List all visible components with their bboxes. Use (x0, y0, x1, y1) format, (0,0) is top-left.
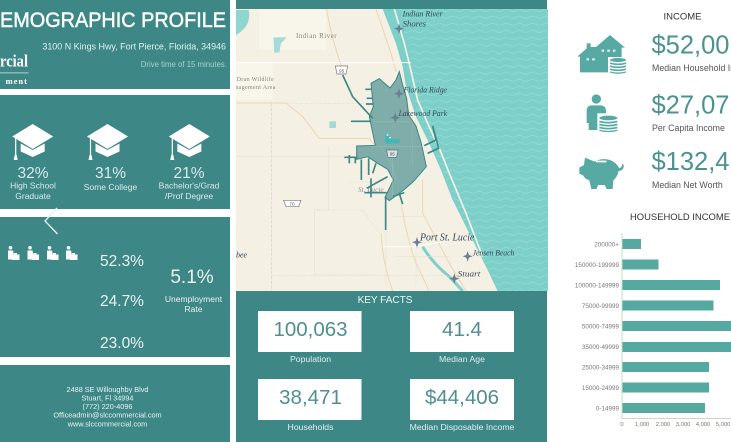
map: interstate shields (284, 66, 398, 207)
logo: rcial (0, 52, 28, 70)
fact: households (258, 379, 362, 432)
stat: median net worth: $132,4 (652, 148, 730, 176)
map: place labels: Shores (403, 19, 427, 29)
panel: contact: (772) 220-4096 (83, 402, 132, 411)
bar chart: household income: 200000+ (594, 242, 619, 248)
stat: median household income: $52,00 (652, 32, 730, 60)
map: place labels: St. Lucie (358, 185, 384, 194)
map: place labels: Jensen Beach (473, 247, 514, 257)
bar chart: household income: 150000-199999 (575, 262, 619, 269)
stat: high school: High School (10, 180, 56, 190)
icon: piggy bank (579, 158, 624, 189)
stat: unemployment: 5.1% (170, 267, 214, 288)
stat: bachelor's (159, 165, 220, 201)
map: land tone (236, 10, 326, 100)
map: interstate shields: 70 (289, 201, 295, 206)
stat: high school (10, 165, 56, 201)
panel: contact (0, 365, 230, 442)
title: EMOGRAPHIC PROFILE (0, 9, 226, 32)
stat: some college: 31% (95, 165, 126, 182)
stat: unemployment (165, 267, 223, 314)
icon: graduation cap 2 (87, 124, 128, 160)
panel: map: Indian River (296, 32, 337, 40)
map: interstate shields: 95 (339, 68, 345, 73)
heading: key facts: KEY FACTS (358, 295, 413, 306)
stat: median household income (652, 32, 731, 73)
bar chart: household income: 50000-74999 (582, 324, 619, 330)
bar chart: household income: 3,000 (676, 422, 690, 428)
panel: header (0, 0, 230, 89)
map: drive-time area (343, 72, 439, 230)
panel: map (235, 0, 548, 291)
employment percentages: 23.0% (100, 335, 144, 352)
fact: population: 100,063 (273, 318, 348, 341)
icon: workers row (8, 246, 78, 260)
stat: median net worth (652, 148, 730, 190)
bar chart: household income: 1,000 (635, 422, 649, 428)
stat: unemployment: Rate (185, 304, 203, 314)
stat: per capita income: Per Capita Income (652, 123, 725, 133)
icon: graduation cap 1 (12, 124, 53, 160)
heading: household income: HOUSEHOLD INCOME (630, 212, 730, 223)
map: place labels: Florida Ridge (403, 84, 447, 94)
panel: contact: www.slccommercial.com (67, 420, 147, 428)
fact: median disposable income (410, 379, 515, 432)
panel: education (0, 95, 230, 209)
bar chart: household income: 0 (620, 422, 624, 428)
fact: median disposable income: $44,406 (425, 386, 499, 409)
stat: some college: Some College (84, 182, 137, 192)
bar chart: household income: 25000-34999 (582, 364, 619, 372)
map: ocean (383, 9, 548, 291)
map: lakes (236, 10, 249, 35)
heading: income: INCOME (664, 12, 702, 22)
bar chart: household income: 2,000 (656, 422, 670, 428)
employment percentages: 24.7% (100, 293, 144, 310)
fact: median disposable income: Median Disposable Income (410, 422, 515, 432)
stat: bachelor's: /Prof Degree (165, 191, 213, 201)
stat: bachelor's: Bachelor's/Grad (159, 180, 220, 190)
panel: contact: Officeadmin@slccommercial.com (53, 410, 162, 420)
stat: high school: Graduate (15, 191, 51, 201)
fact: population (258, 311, 362, 364)
fact: median age (410, 311, 514, 364)
stat: high school: 32% (17, 165, 49, 182)
icon: person with coins (587, 94, 619, 134)
stat: per capita income: $27,07 (652, 92, 730, 120)
icon: graduation cap 3 (169, 124, 210, 160)
panel: map: Dran Wildlife (237, 76, 274, 83)
icon: carousel chevron (45, 208, 58, 234)
map: place labels: Stuart (458, 269, 481, 279)
stat: per capita income (652, 92, 730, 133)
panel: map: nagement Area (235, 85, 276, 91)
drive time note: Drive time of 15 minutes. (141, 60, 227, 69)
icon: house with coins (577, 35, 629, 76)
map: place labels (236, 9, 514, 279)
bar chart: household income: 4,000 (696, 422, 710, 428)
logo (0, 52, 28, 86)
panel: employment (0, 217, 230, 357)
map: place labels: bee (236, 251, 248, 260)
stat: median net worth: Median Net Worth (652, 180, 723, 190)
fact: households: 38,471 (279, 386, 342, 409)
stat: bachelor's: 21% (173, 165, 205, 182)
map: barrier island (394, 9, 483, 257)
panel: key facts (236, 291, 547, 442)
bar chart: household income (575, 233, 731, 428)
bar chart: household income: 0-14999 (596, 406, 619, 412)
bar chart: household income: 35000-49999 (582, 344, 619, 351)
bar chart: household income: 75000-99999 (582, 303, 619, 310)
map: roads (236, 9, 466, 291)
stat: some college (84, 165, 137, 192)
map: place labels: Indian River (402, 9, 443, 19)
address: 3100 N Kings Hwy, Fort Pierce, Florida, 34946 (42, 42, 226, 52)
employment percentages (100, 253, 144, 352)
map: site marker (385, 133, 399, 143)
map: place labels: Port St. Lucie (419, 232, 474, 244)
logo: ment (6, 76, 28, 86)
bar chart: household income: 5,000 (716, 422, 730, 428)
map: place labels: Lakewood Park (398, 108, 447, 118)
fact: households: Households (288, 422, 334, 432)
stat: unemployment: Unemployment (165, 294, 223, 304)
fact: population: Population (290, 354, 331, 364)
fact: median age: 41.4 (442, 318, 482, 341)
employment percentages: 52.3% (100, 253, 144, 270)
panel: contact: 2488 SE Willoughby Blvd (67, 385, 148, 394)
map: city markers (390, 23, 473, 284)
bar chart: household income: 15000-24999 (582, 385, 619, 392)
map: interstate shields: 95 (390, 152, 395, 157)
panel: contact: Stuart, Fl 34994 (82, 394, 133, 402)
fact: median age: Median Age (439, 354, 485, 364)
bar chart: household income: 100000-149999 (575, 282, 619, 290)
